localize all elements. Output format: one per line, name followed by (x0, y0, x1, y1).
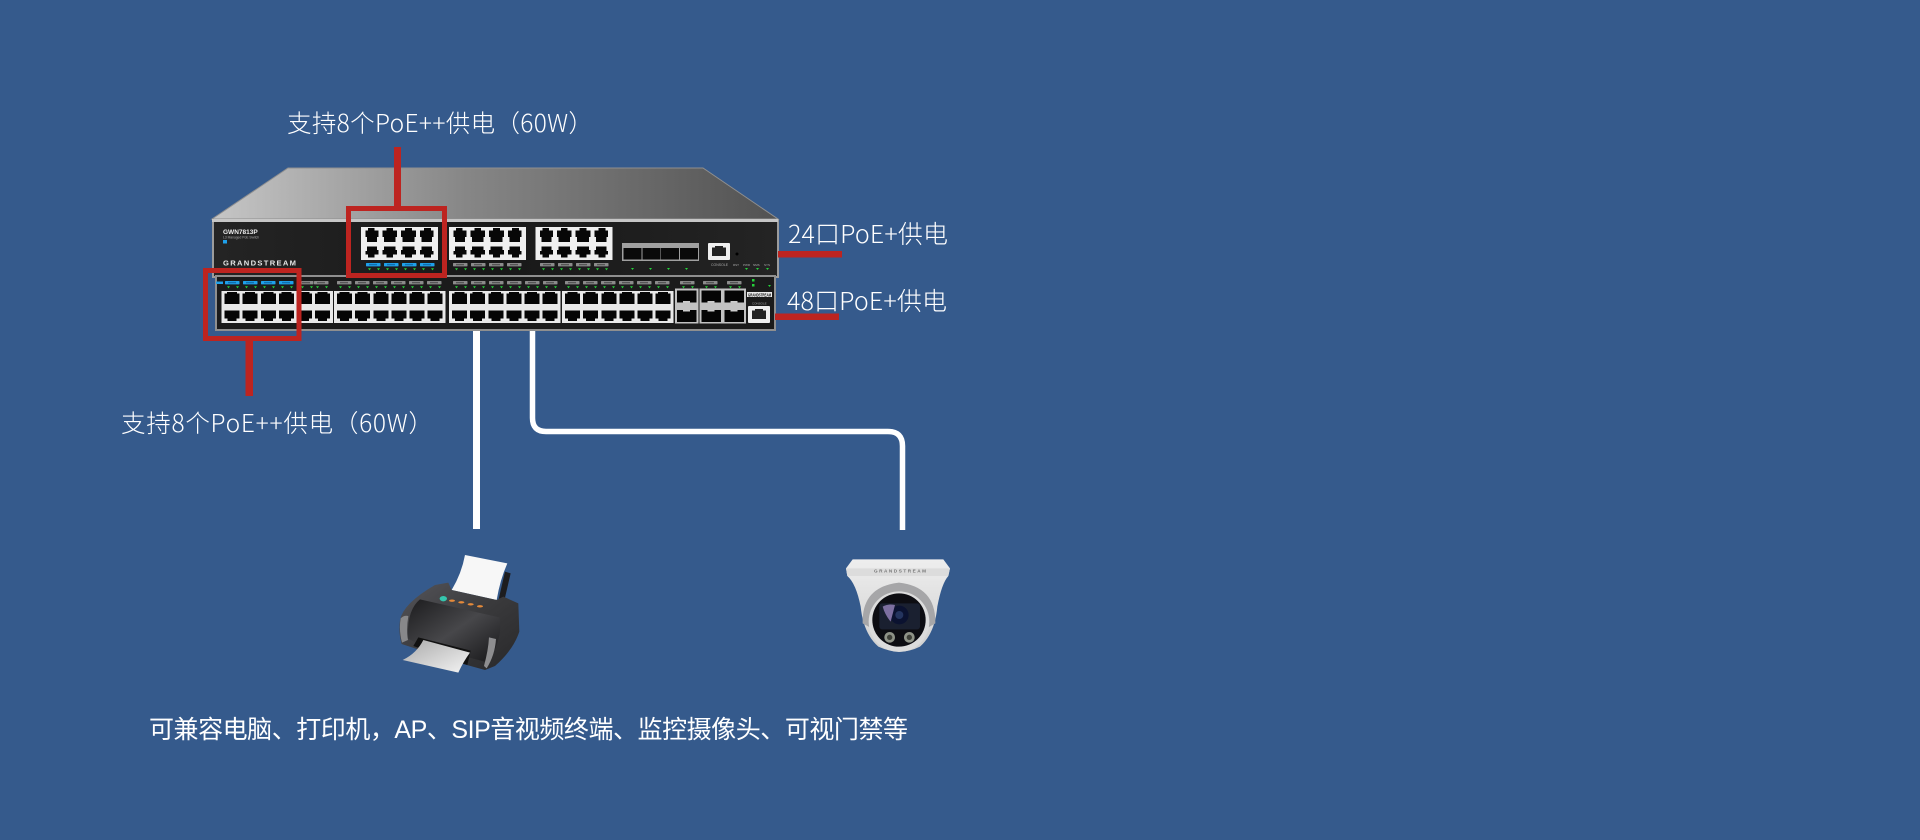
24-port front panel (213, 220, 778, 277)
cable to camera (532, 330, 902, 530)
console port: SYS (764, 263, 770, 267)
model text and logo: GWN7813P (223, 229, 258, 236)
model text and logo: GRANDSTREAM (223, 258, 296, 268)
icon: dome camera (846, 559, 950, 652)
RJ45 port groups (361, 227, 612, 260)
label: 24-port: 24口PoE+供电 (788, 215, 948, 251)
console port: CONSOLE (711, 263, 729, 267)
48-port front panel (216, 276, 775, 330)
switch: 48-port unit (216, 276, 775, 330)
small logo and console port (747, 292, 772, 323)
model text and logo (223, 229, 296, 268)
red leader: 24 port (778, 251, 842, 258)
icon: printer (399, 555, 519, 673)
SFP cages (622, 243, 699, 270)
switch top cover (212, 168, 778, 219)
SFP cages (675, 288, 746, 324)
switch: 24-port unit (212, 168, 778, 277)
caption: compatible devices: 可兼容电脑、打印机，AP、SIP音视频终端、监控摄像头、可视门禁等 (149, 716, 908, 744)
console port (708, 243, 770, 270)
panel top highlight (212, 219, 778, 222)
RJ45 port groups (222, 291, 674, 323)
model text and logo: L3 Managed PoE Switch (223, 236, 259, 240)
console port: RST (733, 263, 739, 267)
status indicators (216, 279, 771, 288)
console port: PWR (743, 263, 751, 267)
status indicators (366, 263, 608, 270)
console port: NMS (753, 263, 760, 267)
red highlight box: lower 8 ports (206, 270, 299, 396)
small logo and console port: CONSOLE (752, 302, 767, 306)
cable to printer (473, 328, 480, 529)
label: lower 8 ports PoE++: 支持8个PoE++供电（60W） (121, 405, 433, 440)
label: 48-port: 48口PoE+供电 (787, 282, 947, 318)
red highlight box: upper 8 ports (348, 147, 444, 276)
small logo and console port: GRANDSTREAM (748, 292, 771, 297)
icon: dome camera: GRANDSTREAM (874, 568, 926, 573)
label: upper 8 ports PoE++: 支持8个PoE++供电（60W） (287, 105, 593, 140)
red leader: 48 port (775, 314, 839, 320)
